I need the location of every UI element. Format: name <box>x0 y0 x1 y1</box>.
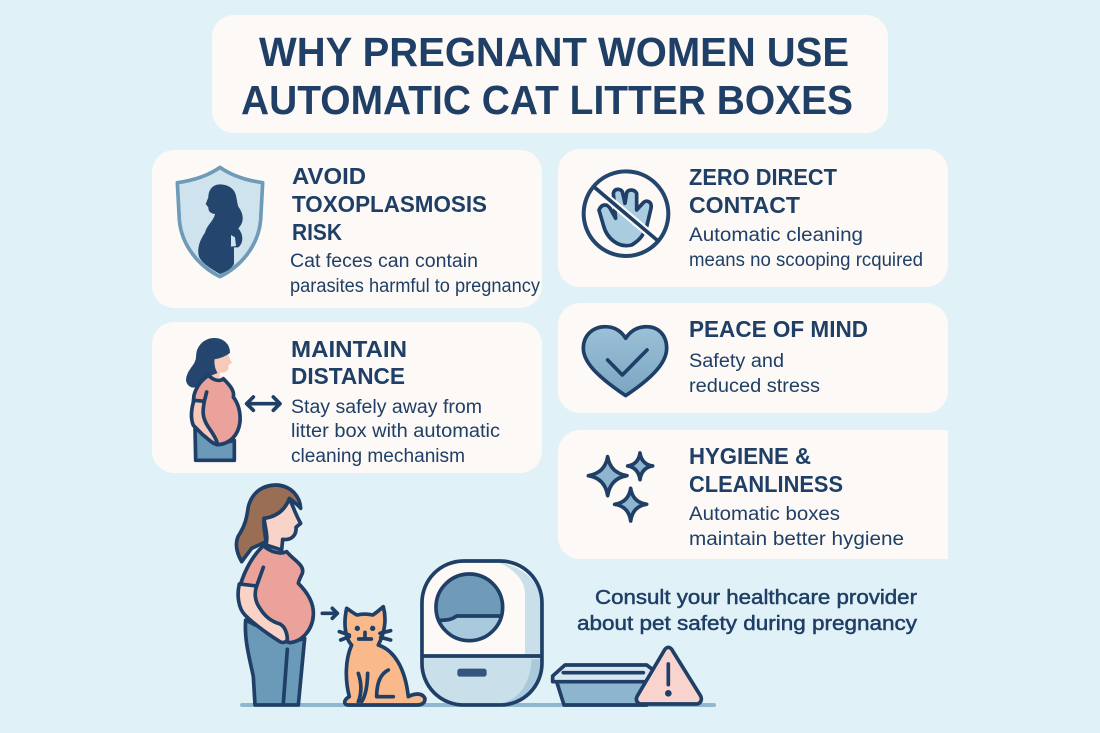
body text: maintain better hygiene <box>689 529 904 550</box>
callout: consult healthcare provider: about pet safety during pregnancy <box>577 613 917 635</box>
heading: MAINTAIN <box>291 336 407 362</box>
panel: zero direct contact <box>558 149 948 287</box>
heading: CONTACT <box>689 192 800 218</box>
icon: pregnant woman with arrow <box>187 339 280 460</box>
body text: Cat feces can contain <box>290 251 478 272</box>
body text <box>689 504 904 550</box>
panel: avoid toxoplasmosis risk <box>152 150 542 308</box>
illustration: cat <box>339 607 425 705</box>
callout: consult healthcare provider: Consult your healthcare provider <box>595 587 917 609</box>
heading: ZERO DIRECT <box>689 164 837 190</box>
title <box>241 29 853 123</box>
callout: consult healthcare provider <box>577 587 917 635</box>
heading: PEACE OF MIND <box>689 316 868 342</box>
body text: Safety and <box>689 351 784 372</box>
icon: sparkles <box>588 453 653 521</box>
illustration: litter tray <box>553 665 653 705</box>
heading: AVOID <box>292 163 366 189</box>
body text <box>689 351 820 397</box>
arrow <box>322 608 337 618</box>
title: AUTOMATIC CAT LITTER BOXES <box>241 77 853 123</box>
heading: HYGIENE & <box>689 443 811 469</box>
heading: RISK <box>292 219 342 245</box>
heading: DISTANCE <box>291 363 405 389</box>
body text: means no scooping rcquired <box>689 250 923 271</box>
ground line <box>240 703 716 707</box>
icon: warning triangle <box>636 647 701 704</box>
title panel <box>212 15 888 133</box>
heading: CLEANLINESS <box>689 471 843 497</box>
illustration: pregnant woman <box>236 485 313 705</box>
body text <box>290 251 540 297</box>
body text: Automatic boxes <box>689 504 840 525</box>
body text <box>689 225 923 271</box>
heading <box>291 336 407 389</box>
panel: hygiene and cleanliness <box>558 430 948 559</box>
icon: shield with pregnant silhouette <box>177 167 263 277</box>
body text: Automatic cleaning <box>689 225 863 246</box>
icon: heart with check mark <box>583 327 667 396</box>
body text <box>291 397 500 467</box>
body text: reduced stress <box>689 376 820 397</box>
body text: cleaning mechanism <box>291 446 465 467</box>
body text: parasites harmful to pregnancy <box>290 276 540 297</box>
heading <box>689 164 837 218</box>
panel: peace of mind <box>558 303 948 413</box>
title: WHY PREGNANT WOMEN USE <box>259 29 849 75</box>
heading <box>689 443 843 497</box>
illustration: automatic litter box <box>422 561 542 705</box>
heading <box>292 163 487 245</box>
panel: maintain distance <box>152 322 542 473</box>
body text: litter box with automatic <box>291 421 500 442</box>
icon: crossed-out hand <box>584 171 668 256</box>
heading: TOXOPLASMOSIS <box>292 191 487 217</box>
body text: Stay safely away from <box>291 397 482 418</box>
